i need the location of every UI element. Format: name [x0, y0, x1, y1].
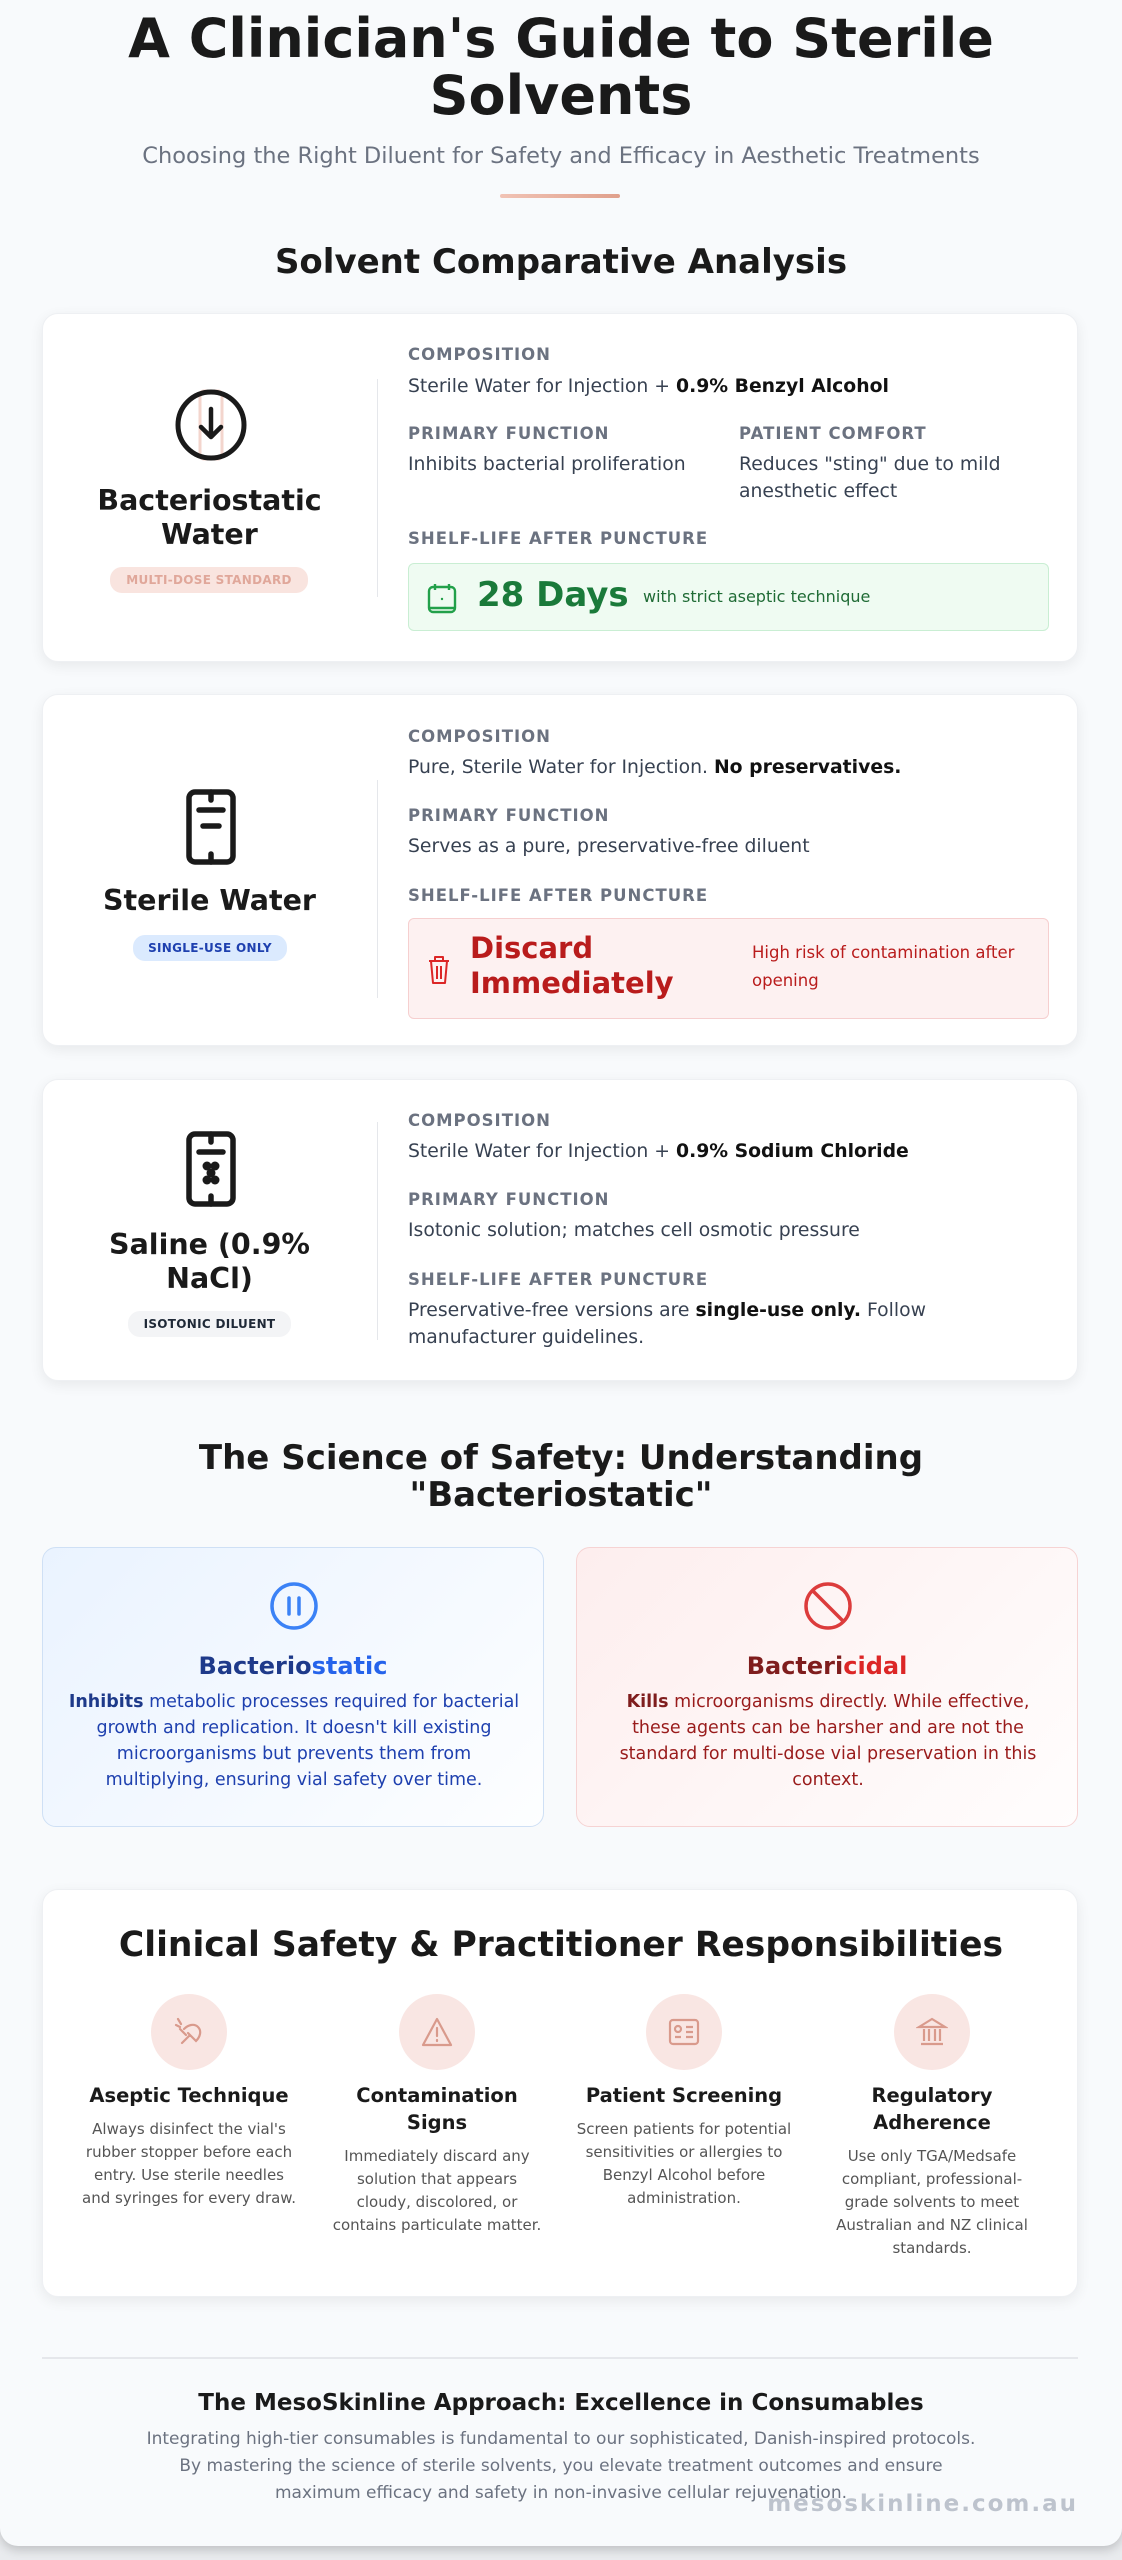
name: Sterile Water [103, 884, 316, 917]
item: contamination signs: Contamination [356, 2084, 518, 2107]
icon: vial [186, 789, 236, 865]
subtitle: Choosing the Right Diluent for Safety and Efficacy in Aesthetic Treatments [142, 143, 980, 169]
item: patient screening: Patient Screening [586, 2084, 782, 2107]
callout: discard immediately: Immediately [470, 966, 674, 1000]
callout: discard immediately [408, 918, 1049, 1019]
panel: clinical safety [42, 1889, 1078, 2297]
section heading: science of safety: "Bacteriostatic" [409, 1475, 713, 1515]
heading: Bactericidal [747, 1652, 907, 1680]
footer text: Integrating high-tier consumables is fundamental to our sophisticated, Danish-inspired protocols. By mastering the science of sterile solvents, you elevate treatment outcomes and ensure maximum efficacy and safety in non-invasive cellular rejuvenation. [147, 2429, 975, 2503]
patient comfort: PATIENT COMFORT [739, 424, 927, 443]
badge [110, 567, 308, 593]
item: aseptic technique: Aseptic Technique [89, 2084, 289, 2107]
primary function: PRIMARY FUNCTION [408, 1190, 609, 1209]
name [109, 1228, 310, 1295]
shelf-life: SHELF-LIFE AFTER PUNCTURE [408, 886, 708, 905]
icon: pause [270, 1582, 318, 1630]
card: bacteriostatic water: Sterile Water for Injection + 0.9% Benzyl Alcohol [408, 376, 889, 397]
card: sterile water: Serves as a pure, preservative-free diluent [408, 836, 810, 857]
shelf-life: SHELF-LIFE AFTER PUNCTURE [408, 529, 708, 548]
primary function: PRIMARY FUNCTION [408, 424, 609, 443]
card: sterile water: Pure, Sterile Water for Injection. No preservatives. [408, 757, 901, 778]
icon: prohibited [804, 1582, 852, 1630]
card: bacteriostatic water: Inhibits bacterial proliferation [408, 454, 686, 475]
primary function: PRIMARY FUNCTION [408, 806, 609, 825]
badge [133, 935, 287, 961]
item: contamination signs: Immediately discard any solution that appears cloudy, discolored, or contains particulate matter. [333, 2147, 541, 2234]
footer heading: The MesoSkinline Approach: Excellence in Consumables [198, 2390, 924, 2416]
icon: saline vial [186, 1131, 236, 1207]
panel: bactericidal [576, 1547, 1078, 1827]
callout: discard immediately: High risk of contamination after opening [752, 943, 1014, 990]
badge: MULTI-DOSE STANDARD [126, 573, 292, 587]
item: aseptic technique [82, 1994, 296, 2207]
item: regulatory adherence: Adherence [873, 2111, 991, 2134]
callout: discard immediately: Discard [470, 931, 593, 965]
icon: vial arrow [176, 390, 246, 460]
composition: COMPOSITION [408, 1111, 551, 1130]
heading: Clinical Safety & Practitioner Responsibilities [119, 1925, 1003, 1965]
composition: COMPOSITION [408, 727, 551, 746]
item: regulatory adherence [836, 1994, 1028, 2257]
name: Water [161, 518, 258, 551]
title: A Clinician's Guide to Sterile [128, 7, 994, 70]
composition: COMPOSITION [408, 345, 551, 364]
card: saline: Isotonic solution; matches cell osmotic pressure [408, 1220, 860, 1241]
card: saline: Sterile Water for Injection + 0.9% Sodium Chloride [408, 1141, 909, 1162]
card: bacteriostatic water [42, 313, 1078, 662]
section heading: science of safety [199, 1438, 923, 1515]
section heading: comparative analysis: Solvent Comparative Analysis [275, 242, 847, 282]
badge [128, 1311, 291, 1337]
text: Inhibits metabolic processes required for bacterial growth and replication. It doesn't kill existing microorganisms but prevents them from multiplying, ensuring vial safety over time. [69, 1692, 519, 1790]
name: Saline (0.9% [109, 1228, 310, 1261]
watermark: mesoskinline.com.au [767, 2491, 1078, 2517]
item: aseptic technique: Always disinfect the vial's rubber stopper before each entry. Use sterile needles and syringes for every draw. [82, 2120, 296, 2207]
text: Kills microorganisms directly. While effective, these agents can be harsher and are not the standard for multi-dose vial preservation in this context. [620, 1692, 1036, 1790]
panel: bacteriostatic [42, 1547, 544, 1827]
card: saline [42, 1079, 1078, 1381]
badge: ISOTONIC DILUENT [144, 1317, 275, 1331]
card: saline: Preservative-free versions are single-use only. Follow manufacturer guidelines. [408, 1300, 926, 1348]
callout: 28 days [408, 563, 1049, 631]
title [128, 7, 994, 127]
title: Solvents [430, 64, 692, 127]
name [97, 484, 322, 551]
badge: SINGLE-USE ONLY [148, 941, 272, 955]
item: contamination signs: Signs [407, 2111, 467, 2134]
item: regulatory adherence: Use only TGA/Medsafe compliant, professional-grade solvents to meet Australian and NZ clinical standards. [836, 2147, 1028, 2257]
callout: 28 days: with strict aseptic technique [643, 587, 870, 606]
heading: Bacteriostatic [199, 1652, 387, 1680]
shelf-life: SHELF-LIFE AFTER PUNCTURE [408, 1270, 708, 1289]
card: bacteriostatic water: Reduces "sting" due to mild anesthetic effect [739, 454, 1000, 502]
card: sterile water [42, 694, 1078, 1046]
item: patient screening [577, 1994, 791, 2207]
item: patient screening: Screen patients for potential sensitivities or allergies to Benzyl Alcohol before administration. [577, 2120, 791, 2207]
callout: 28 days: 28 Days [477, 575, 629, 615]
item: regulatory adherence: Regulatory [872, 2084, 992, 2107]
name: NaCl) [166, 1262, 253, 1295]
item: contamination signs [333, 1994, 541, 2234]
name: Bacteriostatic [97, 484, 322, 517]
section heading: science of safety: The Science of Safety: Understanding [199, 1438, 923, 1478]
